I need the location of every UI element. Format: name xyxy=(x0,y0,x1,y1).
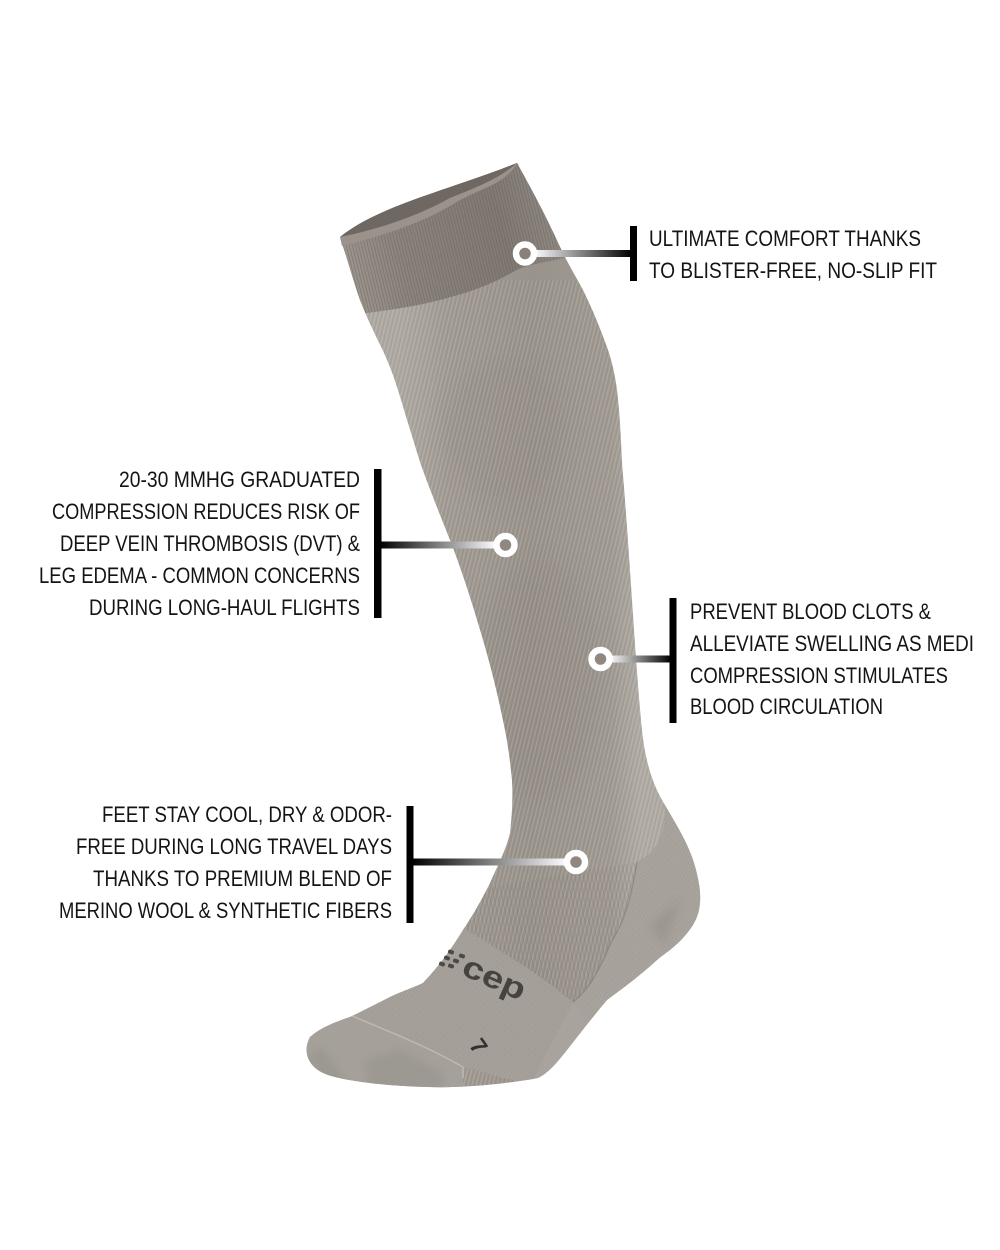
callout text: DEEP VEIN THROMBOSIS (DVT) & xyxy=(60,531,360,556)
callout text: FREE DURING LONG TRAVEL DAYS xyxy=(76,834,392,859)
callout text xyxy=(690,599,974,719)
sock brand logo xyxy=(438,948,532,1007)
marker dot xyxy=(567,853,585,871)
callout text: ULTIMATE COMFORT THANKS xyxy=(649,226,921,251)
connector line xyxy=(380,542,497,548)
callout text xyxy=(39,467,360,620)
bracket bar xyxy=(630,226,637,281)
marker dot xyxy=(496,536,514,554)
bracket bar xyxy=(406,806,414,923)
bracket bar xyxy=(670,598,676,723)
callout text: PREVENT BLOOD CLOTS & xyxy=(690,599,931,624)
callout: merino wool xyxy=(59,802,585,923)
callout text: COMPRESSION STIMULATES xyxy=(690,663,948,688)
callout text: THANKS TO PREMIUM BLEND OF xyxy=(93,866,392,891)
sock midfoot ribbing xyxy=(463,862,637,1002)
sock illustration xyxy=(295,150,720,1100)
sock forefoot mesh xyxy=(350,928,590,1085)
callout text: COMPRESSION REDUCES RISK OF xyxy=(52,499,360,524)
sock size mark: 7 xyxy=(464,1033,493,1059)
callout text: LEG EDEMA - COMMON CONCERNS xyxy=(39,563,360,588)
sock toe xyxy=(306,1016,464,1088)
callout text: 20-30 MMHG GRADUATED xyxy=(119,467,360,492)
sock opening xyxy=(340,163,517,246)
marker dot xyxy=(516,244,534,262)
callout text xyxy=(649,226,937,283)
callout text: TO BLISTER-FREE, NO-SLIP FIT xyxy=(649,258,937,283)
sock heel xyxy=(573,804,700,1024)
callout text: DURING LONG-HAUL FLIGHTS xyxy=(89,595,360,620)
callout: blood circulation xyxy=(592,598,974,723)
callout: graduated compression xyxy=(39,467,514,620)
connector line xyxy=(533,250,632,257)
connector line xyxy=(609,656,671,662)
connector line xyxy=(412,858,568,866)
callout: comfort xyxy=(516,226,937,283)
bracket bar xyxy=(374,469,382,618)
sock brand logo: cep xyxy=(457,948,532,1007)
sock leg xyxy=(300,150,720,1100)
callout text: FEET STAY COOL, DRY & ODOR- xyxy=(102,802,392,827)
callout text xyxy=(59,802,392,923)
marker dot xyxy=(592,650,610,668)
sock cuff xyxy=(340,163,566,314)
callout text: MERINO WOOL & SYNTHETIC FIBERS xyxy=(59,898,392,923)
callout text: BLOOD CIRCULATION xyxy=(690,694,883,719)
